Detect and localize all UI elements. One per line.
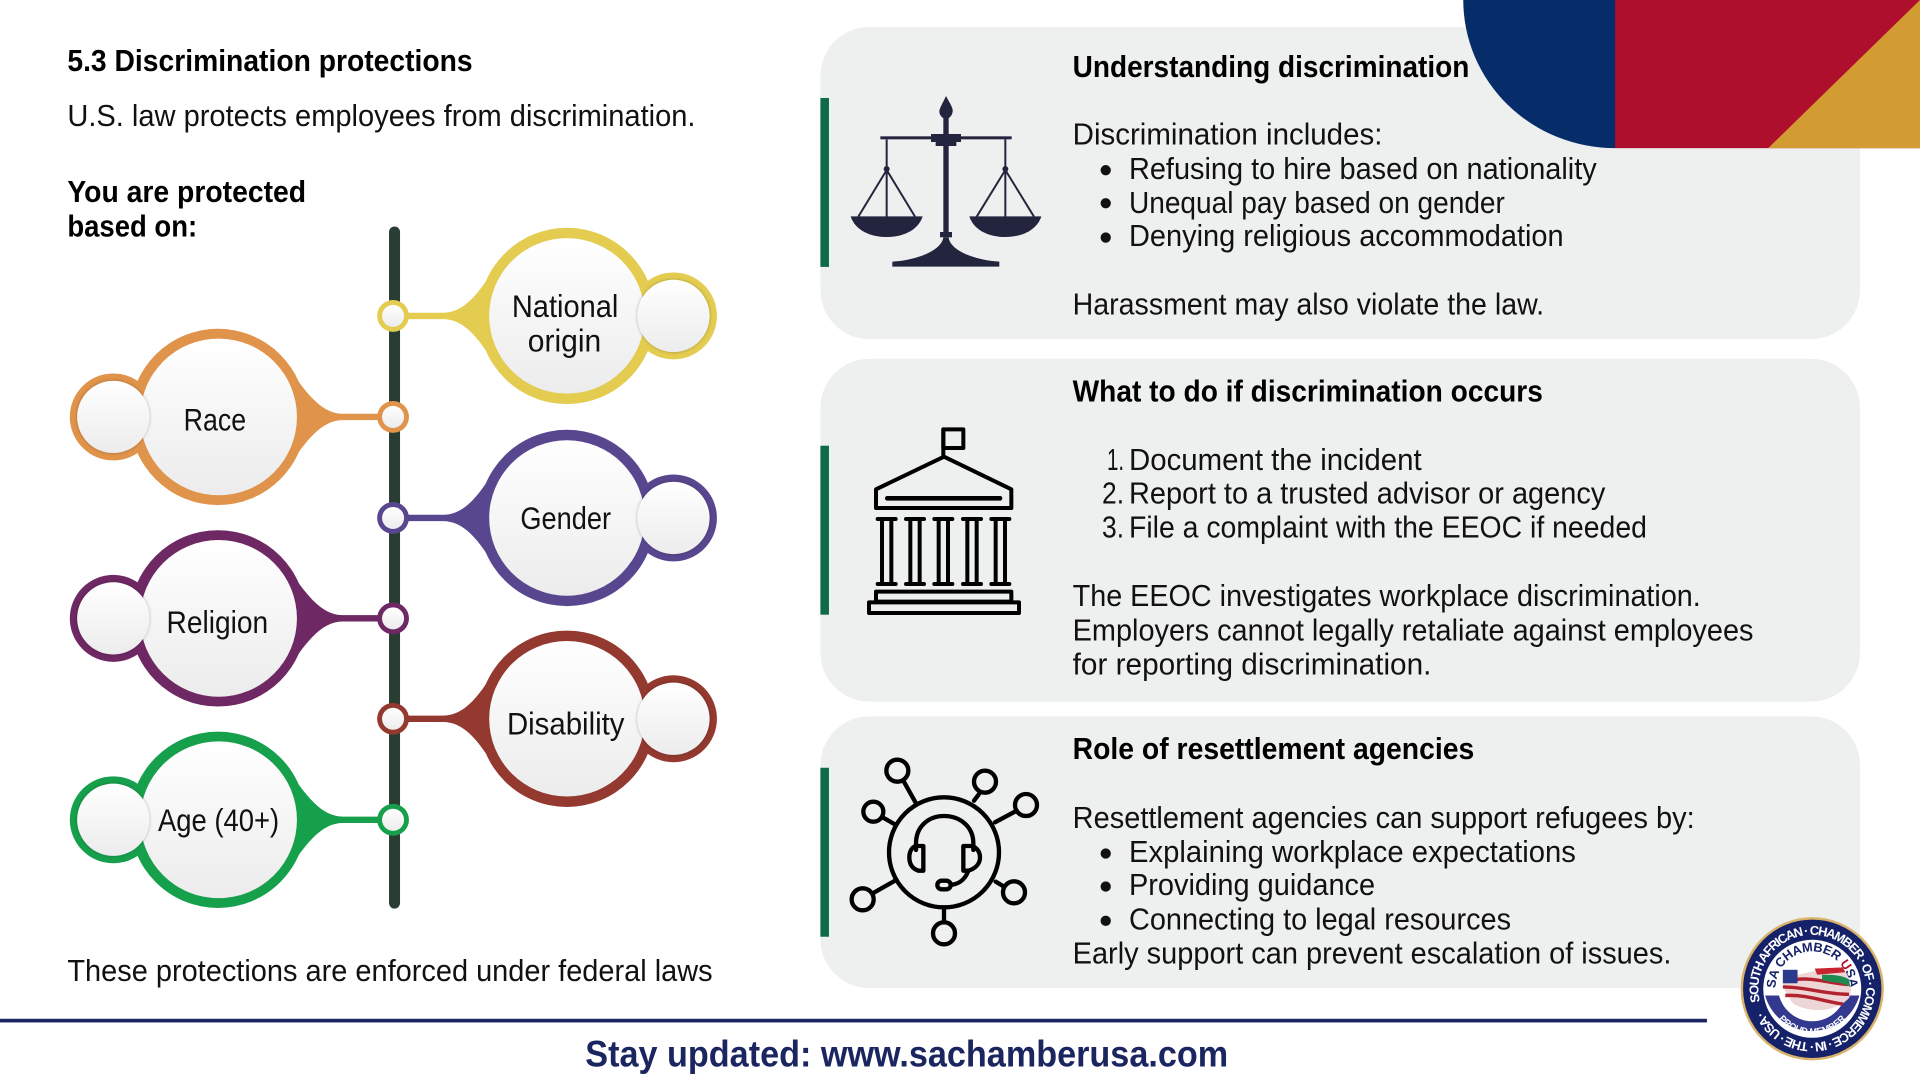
title: 5.3 Discrimination protections — [67, 44, 473, 78]
body text: Explaining workplace expectations — [1129, 835, 1576, 869]
subheading: protected based on: You are protected — [67, 175, 306, 209]
timeline bar — [389, 227, 400, 909]
body text — [1073, 443, 1753, 682]
closing note: These protections are enforced under federal laws — [67, 954, 713, 988]
body text: Report to a trusted advisor or agency — [1129, 476, 1606, 510]
intro text: U.S. law protects employees from discrimination. — [67, 99, 696, 133]
body text: Denying religious accommodation — [1129, 219, 1564, 253]
body text: Connecting to legal resources — [1129, 902, 1511, 936]
corner decoration: navy, red and gold shapes — [1463, 0, 1920, 148]
timeline diagram — [70, 227, 717, 909]
body text: Refusing to hire based on nationality — [1129, 152, 1597, 186]
footer website link: Stay updated: www.sachamberusa.com — [585, 1034, 1228, 1075]
node: age: Age (40+) — [158, 802, 279, 838]
body text: 1. — [1107, 443, 1124, 477]
subheading: protected based on: based on: — [67, 209, 197, 243]
body text — [1073, 117, 1597, 322]
node: gender: Gender — [520, 500, 611, 536]
panel: understanding discrimination — [820, 27, 1860, 339]
body text: Discrimination includes: — [1073, 117, 1382, 151]
node: national origin: National — [512, 288, 618, 324]
heading: What to do if discrimination occurs — [1073, 375, 1543, 409]
panel: what to do — [820, 359, 1860, 702]
node: national origin: origin — [528, 322, 601, 358]
footer rule — [0, 1019, 1707, 1022]
body text: Employers cannot legally retaliate against employees — [1073, 613, 1753, 647]
logo: SA Chamber USA proud member seal: PROUD MEMBER — [1780, 1014, 1845, 1032]
body text: 2. — [1102, 476, 1124, 510]
node: religion: Religion — [167, 604, 268, 640]
heading: Understanding discrimination — [1073, 50, 1469, 84]
heading: Role of resettlement agencies — [1073, 732, 1474, 766]
body text — [1073, 801, 1695, 971]
body text: Providing guidance — [1129, 868, 1375, 902]
node: religion — [70, 530, 409, 707]
node: gender — [377, 430, 717, 606]
logo: SA Chamber USA proud member seal: SA CHAMBER USA — [1766, 942, 1858, 988]
subheading: protected based on — [67, 175, 306, 243]
body text: Unequal pay based on gender — [1129, 186, 1505, 220]
icon: government building — [869, 429, 1019, 613]
icon: headset network — [852, 760, 1037, 944]
body text: Resettlement agencies can support refugees by: — [1073, 801, 1695, 835]
panel: resettlement agencies — [820, 716, 1860, 988]
body text: Early support can prevent escalation of issues. — [1073, 937, 1671, 971]
node: disability: Disability — [507, 706, 625, 742]
body text: 3. — [1102, 511, 1124, 545]
body text: File a complaint with the EEOC if needed — [1129, 511, 1647, 545]
body text: Document the incident — [1129, 443, 1422, 477]
logo: SA Chamber USA proud member seal: SOUTH AFRICAN · CHAMBER · OF · COMMERCE · IN · THE · USA · — [1749, 926, 1875, 1052]
body text: for reporting discrimination. — [1073, 648, 1431, 682]
body text: Harassment may also violate the law. — [1073, 288, 1544, 322]
node: disability — [377, 631, 717, 807]
node: race — [70, 329, 409, 505]
node: age — [70, 732, 409, 908]
body text: The EEOC investigates workplace discrimination. — [1073, 579, 1701, 613]
icon: scales of justice — [851, 96, 1041, 267]
node: national origin — [377, 228, 717, 404]
node: race: Race — [184, 401, 246, 437]
